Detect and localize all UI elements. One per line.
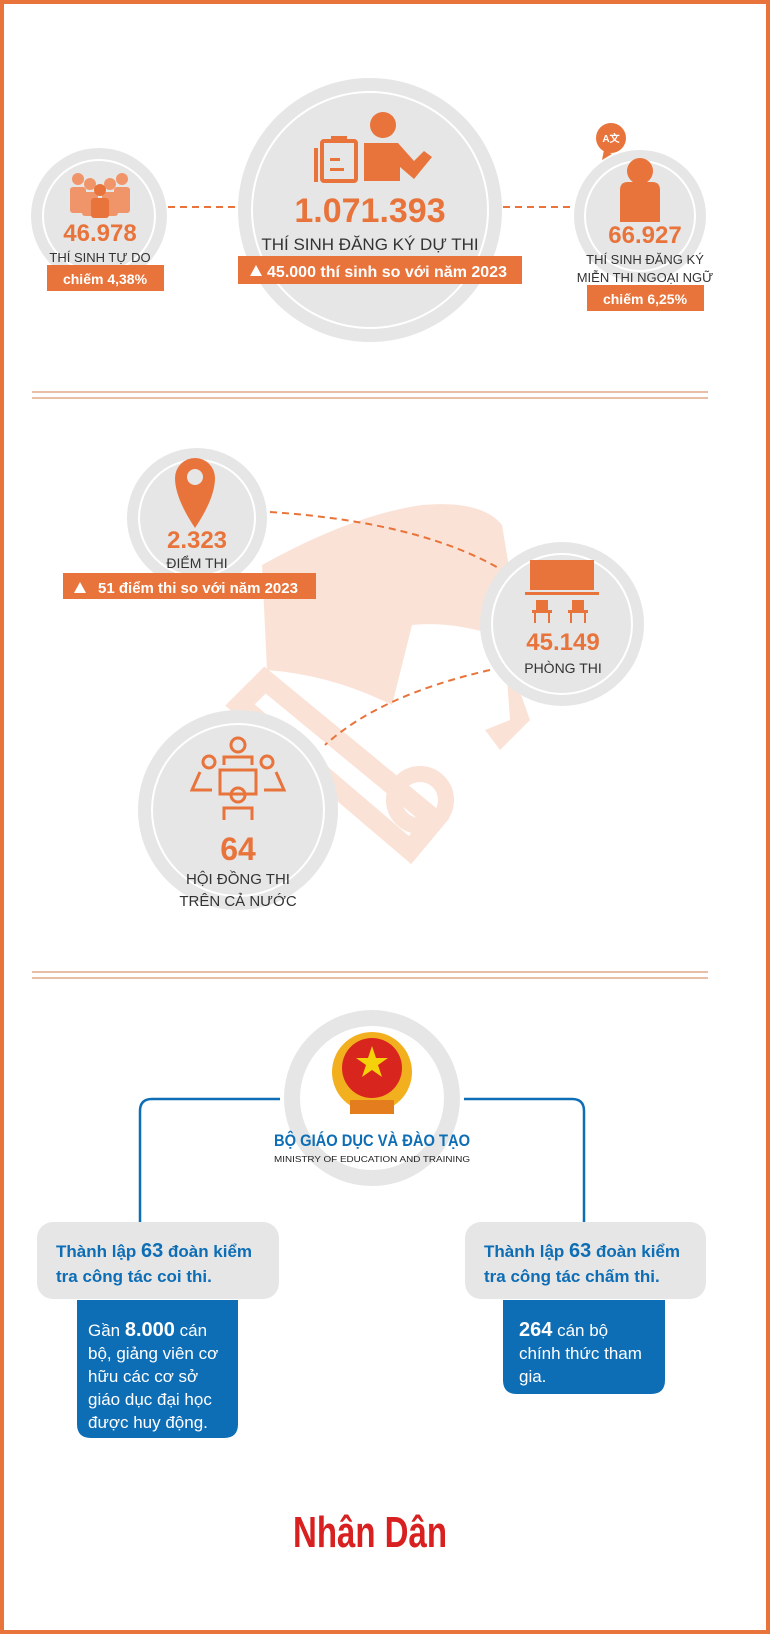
stat right: [577, 222, 713, 311]
box: supervision: [37, 1222, 279, 1299]
stat center: 1.071.393: [294, 192, 446, 230]
box: grading: Thành lập 63 đoàn kiểm: [484, 1240, 680, 1262]
box: supervision detail: Gần 8.000 cán: [88, 1319, 207, 1341]
panel: ministry: [37, 1018, 706, 1438]
box: supervision detail: bộ, giảng viên cơ: [88, 1344, 218, 1363]
box: grading detail: chính thức tham: [519, 1344, 642, 1363]
stat: councils: TRÊN CẢ NƯỚC: [179, 893, 297, 910]
icon: pin: [175, 458, 215, 528]
box: supervision detail: được huy động.: [88, 1413, 208, 1432]
dashed arcs: [270, 512, 502, 745]
box: grading detail: gia.: [519, 1367, 546, 1386]
ministry name: MINISTRY OF EDUCATION AND TRAINING: [274, 1155, 470, 1164]
box: grading: tra công tác chấm thi.: [484, 1267, 660, 1286]
icon: person with translate bubble: [596, 123, 660, 222]
stat left: [47, 220, 164, 291]
stat center: THÍ SINH ĐĂNG KÝ DỰ THI: [261, 235, 479, 254]
circle: location: [127, 448, 267, 588]
icon: meeting: [192, 738, 284, 820]
icon: people group: [70, 173, 130, 218]
box: supervision detail: hữu các cơ sở: [88, 1367, 198, 1386]
stat left: 46.978: [63, 220, 137, 247]
panel: exam venues: [63, 448, 644, 910]
box: supervision: Thành lập 63 đoàn kiểm: [56, 1240, 252, 1262]
box: grading detail: [503, 1300, 665, 1394]
connector lines: [140, 1099, 584, 1264]
stat: councils: HỘI ĐỒNG THI: [186, 870, 290, 888]
graduation cap background: [240, 504, 530, 850]
ministry name: BỘ GIÁO DỤC VÀ ĐÀO TẠO: [274, 1131, 470, 1150]
stat: rooms: PHÒNG THI: [524, 660, 602, 676]
stat: rooms: 45.149: [526, 629, 600, 656]
logo: Nhan Dan: Nhân Dân: [293, 1508, 447, 1557]
box: supervision detail: giáo dục đại học: [88, 1390, 212, 1409]
box: supervision: tra công tác coi thi.: [56, 1267, 212, 1286]
stat right: MIỄN THI NGOẠI NGỮ: [577, 270, 713, 285]
stat left: THÍ SINH TỰ DO: [49, 250, 151, 265]
stat right: 66.927: [608, 222, 682, 249]
stat center: [238, 192, 522, 284]
circle left: [31, 148, 167, 284]
box: grading: [465, 1222, 706, 1299]
ministry name: [274, 1131, 470, 1164]
circle center: [238, 78, 502, 342]
stat: exam sites: [63, 527, 316, 599]
stat left: chiếm 4,38%: [63, 271, 148, 287]
stat: exam sites: ĐIỂM THI: [166, 554, 228, 571]
panel: top stats: [31, 78, 713, 342]
stat: rooms: [524, 629, 602, 676]
stat right: THÍ SINH ĐĂNG KÝ: [586, 252, 704, 267]
stat: councils: 64: [220, 831, 256, 867]
box: grading detail: 264 cán bộ: [519, 1319, 608, 1341]
stat: exam sites: 2.323: [167, 527, 227, 554]
stat right: chiếm 6,25%: [603, 291, 688, 307]
circle right: [574, 150, 706, 282]
dashed connectors: [168, 206, 574, 208]
box: supervision detail: [77, 1300, 238, 1438]
stat: exam sites: 51 điểm thi so với năm 2023: [98, 580, 298, 597]
emblem circle: [292, 1018, 452, 1178]
icon: classroom: [525, 560, 599, 623]
circle: rooms: [480, 542, 644, 706]
icon: person with translate bubble: A文: [602, 132, 621, 145]
stat center: 45.000 thí sinh so với năm 2023: [267, 264, 507, 281]
circle: councils: [138, 710, 338, 910]
icon: clipboard and person: [314, 112, 432, 182]
stat: councils: [179, 831, 297, 910]
icon: emblem: [332, 1032, 412, 1114]
